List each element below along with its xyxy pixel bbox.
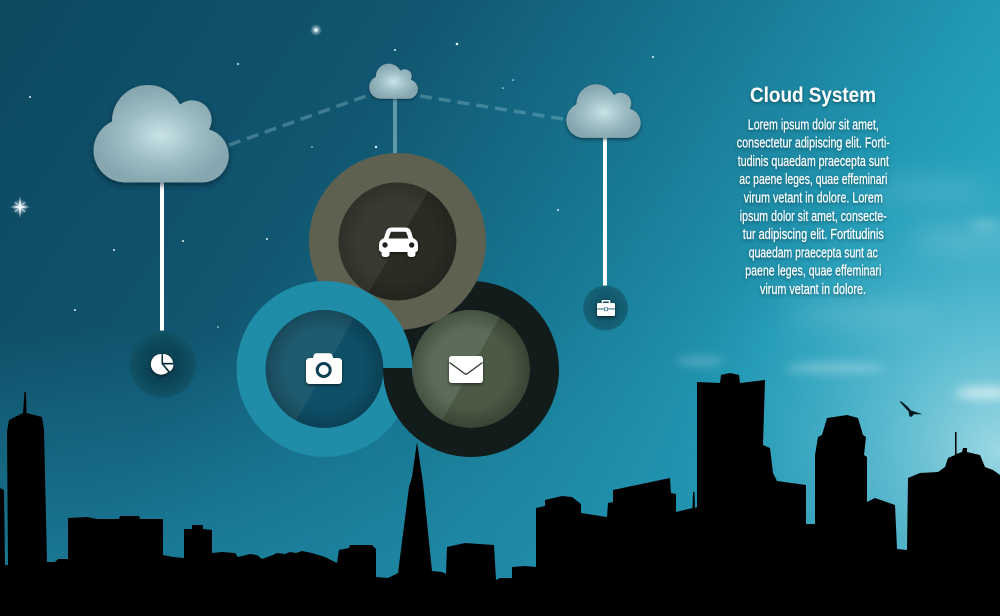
- icon: envelope: [449, 356, 483, 383]
- camera ring: [236, 281, 412, 457]
- body copy: virum vetant in dolore. Lorem: [744, 190, 883, 206]
- connector: small cloud to car ring: [393, 96, 397, 154]
- cloud: medium right: [566, 84, 641, 138]
- body copy: tudinis quaedam praecepta sunt: [738, 154, 889, 170]
- bird silhouette: [900, 402, 923, 417]
- body copy: ipsum dolor sit amet, consecte-: [740, 209, 887, 225]
- city skyline silhouette: [0, 373, 1000, 616]
- camera inner disc: [266, 310, 384, 428]
- connector: large cloud to chart icon: [160, 180, 164, 332]
- body copy: tur adipiscing elit. Fortitudinis: [743, 227, 884, 243]
- heading: Cloud System: [750, 84, 876, 107]
- body copy: Lorem ipsum dolor sit amet,: [748, 117, 879, 133]
- cloud: small centre: [369, 64, 418, 99]
- body copy: [737, 117, 890, 298]
- body copy: virum vetant in dolore.: [760, 282, 866, 298]
- icon: camera: [306, 353, 342, 384]
- mail inner disc: [412, 310, 530, 428]
- car inner disc: [338, 182, 456, 300]
- body copy: consectetur adipiscing elit. Forti-: [737, 136, 890, 152]
- icon: car: [379, 228, 418, 257]
- body copy: paene leges, quae effeminari: [745, 264, 881, 280]
- icon node: briefcase: [583, 286, 628, 330]
- car ring: [309, 153, 486, 330]
- connector: right cloud to briefcase icon: [603, 136, 607, 287]
- stars: [10, 24, 654, 328]
- body copy: quaedam praecepta sunt ac: [749, 245, 878, 261]
- ring diagram: [236, 153, 559, 457]
- mail ring lower overlap: [383, 368, 559, 457]
- dashed links between clouds: [229, 95, 563, 145]
- mail ring base: [383, 281, 559, 457]
- body copy: ac paene leges, quae effeminari: [739, 172, 887, 188]
- cloud: large left: [94, 85, 229, 182]
- text block: Cloud System: [737, 84, 890, 298]
- icon node: pie chart: [129, 330, 196, 398]
